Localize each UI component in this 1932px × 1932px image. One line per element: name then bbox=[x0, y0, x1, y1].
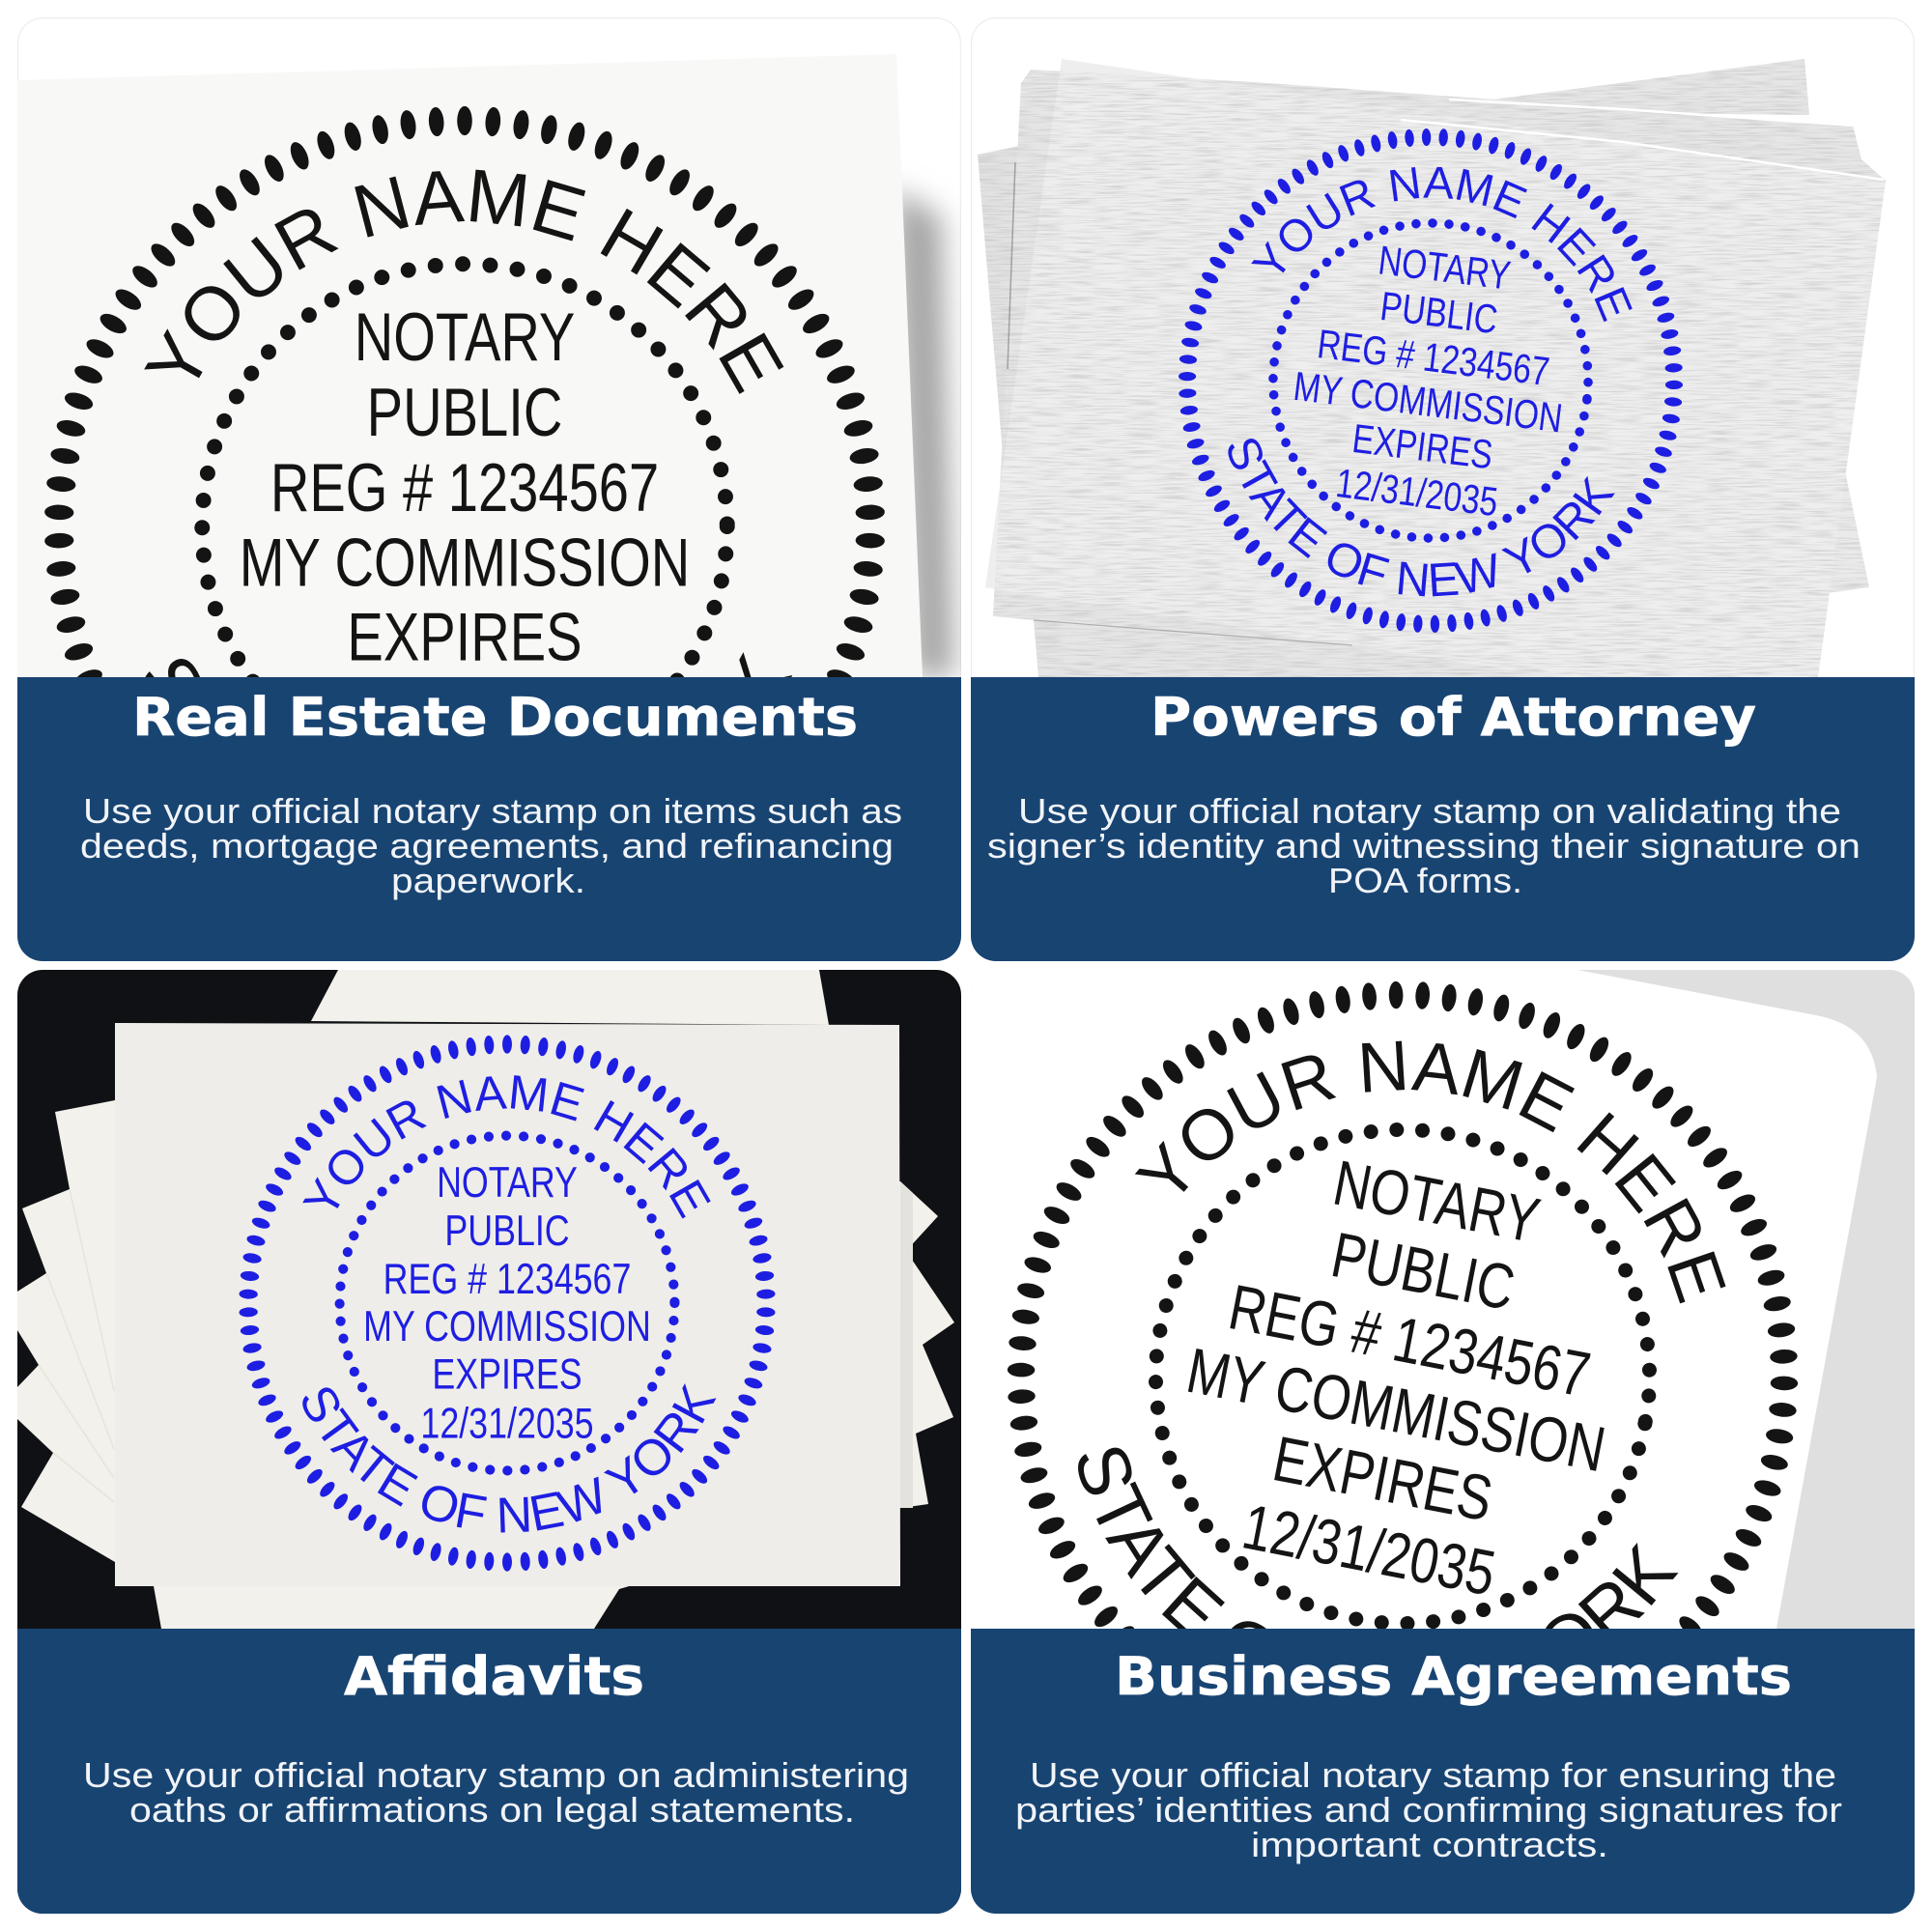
stamp: blue notary seal, tilted: YOUR NAME HERE bbox=[1251, 166, 1633, 323]
photo: textured paper stack bbox=[971, 17, 1915, 677]
stamp: black notary seal, cropped: STATE OF NEW YORK bbox=[145, 652, 792, 677]
description: paperwork. bbox=[391, 861, 585, 900]
heading: Affidavits bbox=[344, 1646, 644, 1707]
panel: powers of attorney bbox=[971, 17, 1915, 961]
stamp: black notary seal, cropped: EXPIRES bbox=[347, 601, 582, 675]
panel: business agreements bbox=[971, 970, 1915, 1914]
stamp: blue notary seal, upright bbox=[240, 1035, 775, 1572]
heading: Real Estate Documents bbox=[132, 687, 858, 748]
description bbox=[86, 1762, 906, 1830]
stamp: black notary seal, tilted and cropped: YOUR NAME HERE bbox=[1134, 1041, 1725, 1304]
heading: Powers of Attorney bbox=[1151, 687, 1756, 748]
caption band bbox=[17, 677, 961, 961]
stamp: black notary seal, cropped: MY COMMISSION bbox=[240, 526, 690, 601]
stamp: blue notary seal, tilted: EXPIRES bbox=[1350, 416, 1495, 478]
stamp: black notary seal, tilted and cropped bbox=[1007, 981, 1799, 1629]
stamp: black notary seal, tilted and cropped: MY COMMISSION bbox=[1181, 1334, 1611, 1486]
stamp: blue notary seal, tilted: 12/31/2035 bbox=[1333, 462, 1500, 526]
description: Use your official notary stamp on administering bbox=[83, 1755, 909, 1795]
description bbox=[1015, 1755, 1842, 1864]
description: parties’ identities and confirming signatures for bbox=[1015, 1790, 1842, 1830]
stamp: black notary seal, tilted and cropped: PUBLIC bbox=[1326, 1218, 1520, 1323]
stamp: blue notary seal, tilted: PUBLIC bbox=[1378, 284, 1500, 343]
description bbox=[80, 791, 902, 900]
description: important contracts. bbox=[1251, 1825, 1608, 1864]
description bbox=[988, 798, 1859, 893]
stamp: black notary seal, cropped: REG # 1234567 bbox=[270, 451, 659, 526]
stamp: black notary seal, tilted and cropped: EXPIRES bbox=[1267, 1423, 1498, 1535]
description: Use your official notary stamp on validating the bbox=[1018, 791, 1841, 831]
stamp: blue notary seal, upright: REG # 1234567 bbox=[384, 1254, 631, 1303]
photo: fanned white sheets on black bbox=[17, 970, 961, 1914]
stamp: blue notary seal, tilted: REG # 1234567 bbox=[1315, 323, 1551, 395]
caption band bbox=[971, 1629, 1915, 1914]
description: Use your official notary stamp for ensuring the bbox=[1030, 1755, 1836, 1795]
stamp: blue notary seal, upright: EXPIRES bbox=[432, 1350, 582, 1398]
description: POA forms. bbox=[1328, 861, 1522, 900]
description: Use your official notary stamp on items such as bbox=[83, 791, 902, 831]
description: signer’s identity and witnessing their signature on bbox=[987, 826, 1861, 866]
stamp: blue notary seal, tilted: MY COMMISSION bbox=[1291, 364, 1565, 441]
panel: real estate documents bbox=[17, 17, 961, 961]
stamp: black notary seal, cropped: PUBLIC bbox=[367, 376, 562, 450]
photo: rounded white card on grey bbox=[1578, 970, 1915, 1629]
stamp: black notary seal, cropped: YOUR NAME HERE bbox=[144, 170, 784, 394]
stamp: black notary seal, cropped: NOTARY bbox=[355, 300, 575, 375]
stamp: black notary seal, tilted and cropped: 12/31/2035 bbox=[1236, 1491, 1501, 1609]
caption band bbox=[17, 1629, 961, 1914]
stamp: blue notary seal, upright: NOTARY bbox=[437, 1157, 578, 1207]
photo: stamped paper sheet with shadow bbox=[17, 17, 961, 677]
stamp: black notary seal, cropped bbox=[44, 106, 885, 677]
stamp: black notary seal, tilted and cropped: NOTARY bbox=[1328, 1147, 1546, 1257]
stamp: blue notary seal, tilted: STATE OF NEW YORK bbox=[1228, 439, 1615, 597]
stamp: black notary seal, tilted and cropped: STATE OF NEW YORK bbox=[1078, 1447, 1679, 1629]
description: deeds, mortgage agreements, and refinancing bbox=[80, 826, 894, 866]
stamp: blue notary seal, tilted: NOTARY bbox=[1376, 239, 1513, 299]
stamp: blue notary seal, upright: YOUR NAME HERE bbox=[302, 1075, 711, 1219]
panel: affidavits bbox=[17, 970, 961, 1914]
stamp: blue notary seal, upright: 12/31/2035 bbox=[420, 1399, 594, 1447]
stamp: blue notary seal, upright: MY COMMISSION bbox=[363, 1301, 651, 1350]
stamp: blue notary seal, upright: PUBLIC bbox=[444, 1206, 570, 1255]
description: oaths or affirmations on legal statements. bbox=[129, 1790, 855, 1830]
stamp: blue notary seal, tilted bbox=[1179, 128, 1683, 633]
stamp: blue notary seal, upright: STATE OF NEW YORK bbox=[302, 1383, 717, 1532]
stamp: black notary seal, tilted and cropped: REG # 1234567 bbox=[1223, 1271, 1596, 1410]
heading: Business Agreements bbox=[1115, 1646, 1792, 1707]
caption band bbox=[971, 677, 1915, 961]
